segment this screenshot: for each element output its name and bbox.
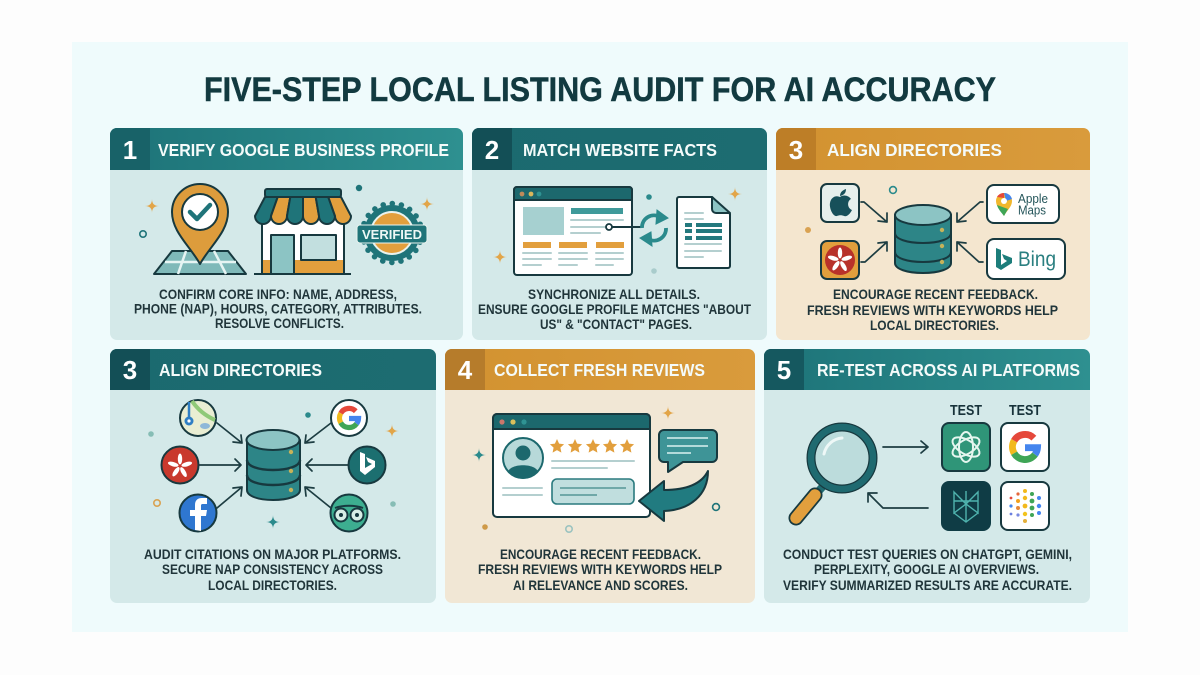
icon: apple maps tile: [987, 185, 1059, 223]
step 2 header: 2: [485, 135, 499, 165]
teal step 3 description: SECURE NAP CONSISTENCY ACROSS: [162, 561, 383, 577]
page background panel: [72, 42, 1128, 632]
teal step 3 description: [144, 546, 401, 593]
step 3 description: ENCOURAGE RECENT FEEDBACK.: [833, 286, 1038, 302]
icon: apple tile: [821, 184, 859, 222]
test labels: TEST: [1009, 402, 1041, 419]
icon: verified badge: [357, 204, 427, 262]
icon: database: [246, 430, 300, 500]
step 4 description: FRESH REVIEWS WITH KEYWORDS HELP: [478, 561, 722, 577]
step 2 description: US" & "CONTACT" PAGES.: [540, 316, 692, 332]
panel: step 2 match website facts: [472, 128, 767, 340]
step 5 header: 5: [777, 355, 791, 385]
icon: facebook circle: [180, 494, 216, 532]
decorative sparkles and dots, step 1: [140, 185, 434, 237]
panel: step 1 verify google business profile: [110, 128, 463, 340]
arrows into database: [861, 202, 983, 262]
teal step 3 description: AUDIT CITATIONS ON MAJOR PLATFORMS.: [144, 546, 401, 562]
orange step 3 header: 3: [789, 135, 803, 165]
icon: chatgpt tile: [942, 423, 990, 471]
step 5 header: RE-TEST ACROSS AI PLATFORMS: [817, 360, 1080, 380]
step 5 description: PERPLEXITY, GOOGLE AI OVERVIEWS.: [814, 561, 1039, 577]
panel: step 3 align directories (teal): [110, 349, 436, 603]
icon: apple maps tile: Apple: [1018, 192, 1048, 206]
five star rating: [550, 439, 634, 453]
icon: perplexity tile: [942, 482, 990, 530]
step 5 description: VERIFY SUMMARIZED RESULTS ARE ACCURATE.: [783, 577, 1072, 593]
icon: verified badge: VERIFIED: [362, 228, 422, 242]
icon: magnifying glass: [796, 427, 873, 518]
panel: step 4 collect fresh reviews: [445, 349, 755, 603]
step 4 description: ENCOURAGE RECENT FEEDBACK.: [500, 546, 701, 562]
step 4 description: AI RELEVANCE AND SCORES.: [513, 577, 688, 593]
teal step 3 header: ALIGN DIRECTORIES: [159, 360, 322, 380]
icon: database: [895, 205, 951, 273]
teal step 3 header: [110, 349, 436, 390]
step 1 description: [134, 286, 422, 331]
icon: gemini tile: [1001, 482, 1049, 530]
icon: storefront: [254, 189, 351, 274]
step 2 description: SYNCHRONIZE ALL DETAILS.: [528, 286, 700, 302]
teal step 3 header: 3: [123, 355, 137, 385]
step 3 description: LOCAL DIRECTORIES.: [870, 317, 999, 333]
icon: yelp tile: [821, 241, 859, 279]
step 4 description: [478, 546, 722, 593]
icon: sync arrows: [640, 210, 668, 246]
icon: bing tile: Bing: [1018, 248, 1056, 271]
step 1 description: CONFIRM CORE INFO: NAME, ADDRESS,: [159, 286, 397, 302]
panel: step 3 align directories (orange): [776, 128, 1090, 340]
icon: website browser: [514, 187, 642, 275]
arrows into database: [199, 423, 348, 508]
orange step 3 header: [776, 128, 1090, 170]
step 2 description: ENSURE GOOGLE PROFILE MATCHES "ABOUT: [478, 301, 751, 317]
icon: map pin on map: [154, 184, 246, 274]
icon: review browser window: [493, 414, 650, 517]
step 5 description: [783, 546, 1072, 593]
decorative dots, step 3: [805, 187, 896, 233]
icon: maps circle: [180, 400, 216, 436]
icon: chat bubble: [659, 430, 717, 472]
avatar: [503, 438, 543, 479]
step 4 header: 4: [458, 355, 473, 385]
step 2 description: [478, 286, 751, 332]
step 1 header: VERIFY GOOGLE BUSINESS PROFILE: [158, 140, 449, 160]
decorative sparkles and dots, step 2: [493, 187, 742, 274]
panel: step 5 re-test across ai platforms: [764, 349, 1090, 603]
icon: bing tile: [987, 239, 1065, 279]
step 1 description: PHONE (NAP), HOURS, CATEGORY, ATTRIBUTES.: [134, 300, 422, 316]
icon: google tile: [1001, 423, 1049, 471]
step 5 header: [764, 349, 1090, 390]
test labels: [950, 402, 1041, 419]
icon: apple maps tile: Maps: [1018, 204, 1046, 218]
decorative sparkles and dots, teal step 3: [148, 412, 399, 529]
step 4 header: COLLECT FRESH REVIEWS: [494, 360, 705, 380]
step 1 description: RESOLVE CONFLICTS.: [215, 315, 344, 331]
icon: yelp circle: [162, 446, 198, 484]
step 2 header: MATCH WEBSITE FACTS: [523, 140, 717, 160]
icon: bing circle: [348, 446, 386, 484]
step 1 header: [110, 128, 463, 170]
icon: document: [677, 197, 730, 268]
icon: curved arrow: [639, 471, 708, 521]
step 5 description: CONDUCT TEST QUERIES ON CHATGPT, GEMINI,: [783, 546, 1072, 562]
test labels: TEST: [950, 402, 982, 419]
icon: google circle: [331, 400, 367, 436]
arrows to AI platforms: [868, 441, 928, 508]
teal step 3 description: LOCAL DIRECTORIES.: [208, 577, 337, 593]
step 2 header: [472, 128, 767, 170]
step 3 description: FRESH REVIEWS WITH KEYWORDS HELP: [807, 302, 1058, 318]
step 1 header: 1: [123, 135, 137, 165]
step 3 description: [807, 286, 1058, 333]
icon: tripadvisor circle: [330, 494, 368, 532]
title: FIVE-STEP LOCAL LISTING AUDIT FOR AI ACCURACY: [204, 71, 996, 109]
decorative sparkles and dots, step 4: [472, 406, 719, 532]
orange step 3 header: ALIGN DIRECTORIES: [827, 140, 1002, 160]
step 4 header: [445, 349, 755, 390]
